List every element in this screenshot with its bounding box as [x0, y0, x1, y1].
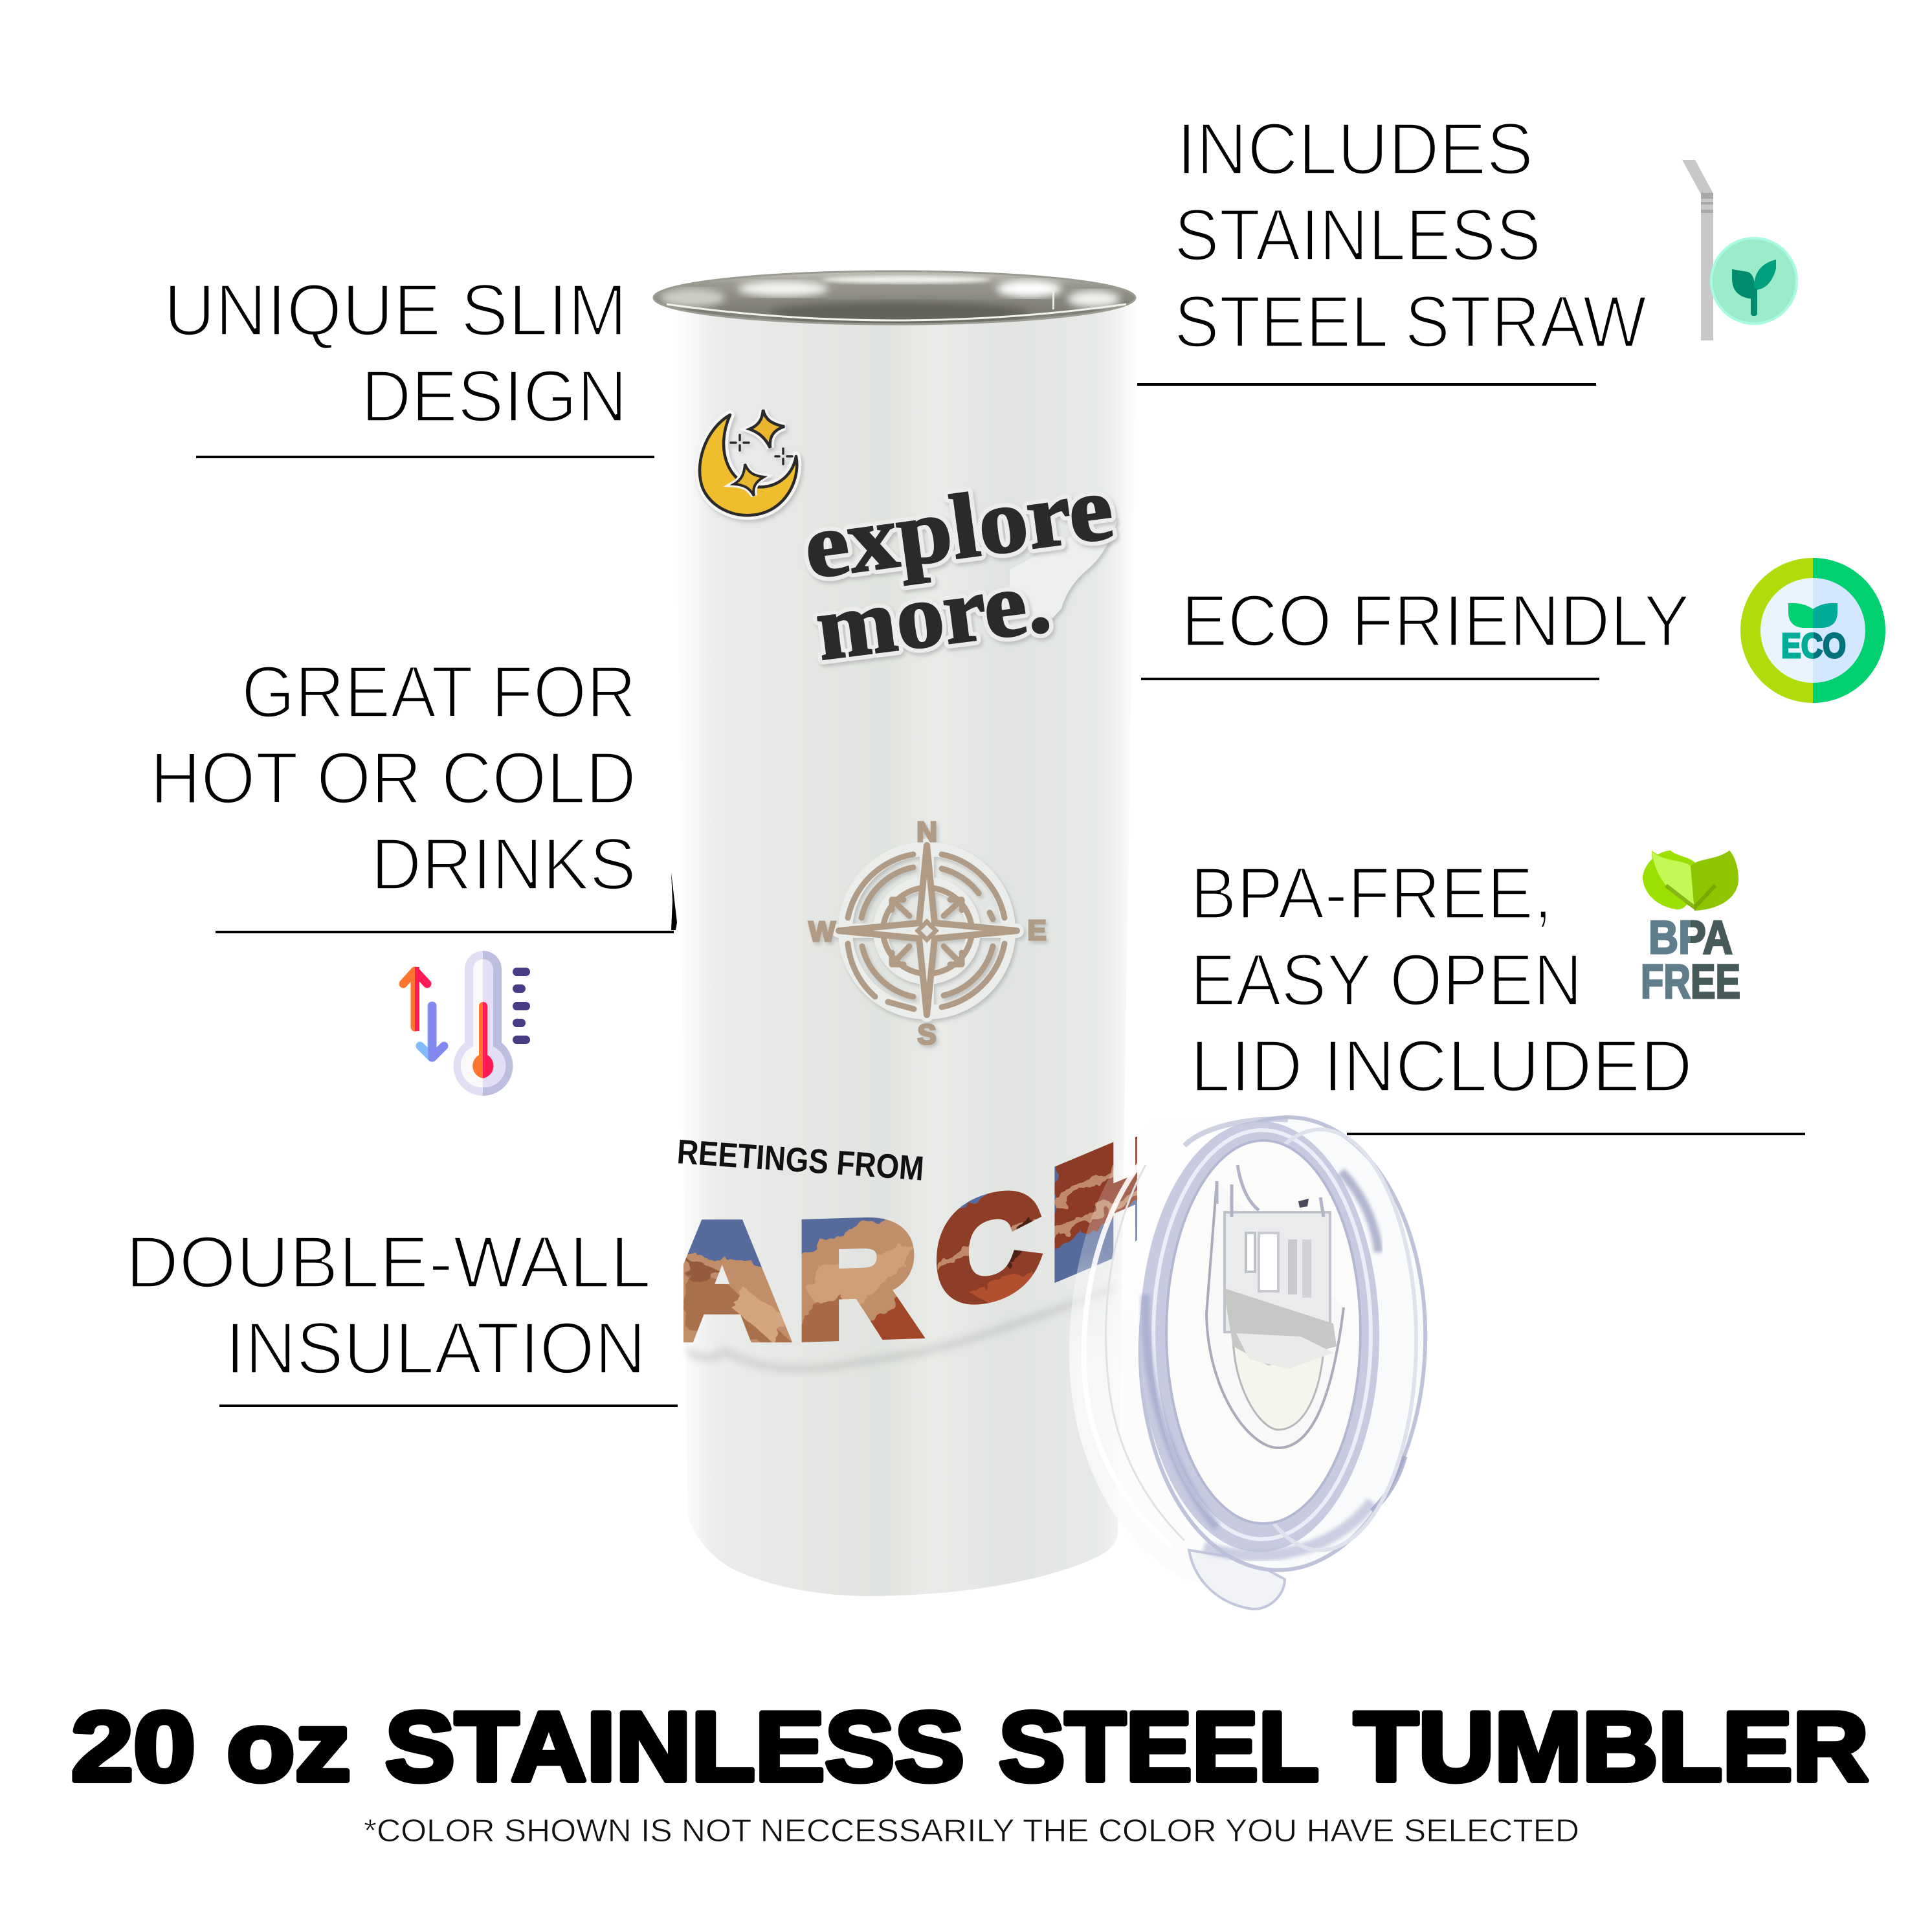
label: great for hot or cold drinks: HOT OR COLD	[150, 737, 636, 819]
icon: eco badge: ECO	[1781, 627, 1846, 665]
explore more sticker: explore	[798, 456, 1118, 598]
temperature scale dashes	[513, 968, 530, 1044]
label: great for hot or cold drinks: GREAT FOR	[241, 651, 636, 733]
title: TUMBLER	[1354, 1692, 1869, 1802]
icon: bpa free: FREE	[1641, 955, 1740, 1008]
icon: straw with sprout	[1682, 160, 1797, 340]
stray black sliver at edge	[671, 872, 677, 930]
label: double-wall insulation	[126, 1221, 678, 1407]
moon and stars sticker	[700, 410, 797, 515]
title	[71, 1692, 1869, 1802]
lid slider	[1217, 1165, 1337, 1369]
explore more sticker: more.	[810, 549, 1056, 680]
compass sticker: E	[1027, 915, 1047, 946]
arrow down	[420, 1006, 444, 1058]
tumbler rim	[654, 271, 1135, 325]
icon: thermometer with arrows	[403, 951, 530, 1096]
label: double-wall insulation: INSULATION	[225, 1307, 646, 1389]
tumbler	[641, 271, 1159, 1596]
compass sticker	[808, 816, 1047, 1050]
label: great for hot or cold drinks: DRINKS	[371, 823, 636, 905]
sprout badge	[1711, 238, 1797, 324]
explore more sticker: explore	[798, 456, 1118, 598]
icon: bpa free	[1641, 850, 1740, 1008]
label: double-wall insulation: DOUBLE-WALL	[126, 1221, 651, 1303]
title: STEEL	[999, 1692, 1319, 1802]
footnote: *COLOR SHOWN IS NOT NECCESSARILY THE COLOR YOU HAVE SELECTED	[364, 1814, 1579, 1849]
clear lid	[1069, 1113, 1433, 1609]
label: great for hot or cold drinks	[150, 651, 674, 933]
label: unique slim design: DESIGN	[361, 355, 627, 437]
label: eco friendly: ECO FRIENDLY	[1181, 580, 1690, 661]
lid outer lip	[1133, 1113, 1433, 1575]
compass sticker: S	[917, 1019, 937, 1050]
label: includes stainless steel straw: STAINLESS	[1174, 194, 1541, 276]
label: unique slim design	[164, 269, 654, 458]
straw	[1682, 160, 1713, 340]
compass sticker: N	[916, 816, 937, 848]
compass sticker: W	[808, 916, 836, 948]
explore more sticker: more.	[810, 549, 1056, 680]
lid thick ring	[1140, 1119, 1416, 1555]
label: includes stainless steel straw: INCLUDES	[1177, 108, 1533, 190]
shadow beneath arch lettering	[687, 1288, 1113, 1369]
title: 20 oz	[71, 1692, 351, 1802]
label: bpa-free easy open lid included: BPA-FREE,	[1190, 852, 1553, 934]
label: includes stainless steel straw: STEEL STRAW	[1174, 281, 1647, 362]
label: bpa-free easy open lid included: EASY OPEN	[1190, 939, 1582, 1021]
lid inner face	[1166, 1140, 1360, 1524]
icon: bpa free: BPA	[1649, 912, 1733, 964]
arch lettering with rock photo fill	[683, 1137, 1137, 1342]
label: unique slim design: UNIQUE SLIM	[164, 269, 627, 351]
label: bpa-free easy open lid included: LID INCLUDED	[1190, 1025, 1693, 1107]
explore more sticker	[798, 456, 1118, 680]
lid side wall	[1069, 1120, 1424, 1599]
tumbler body	[675, 304, 1137, 1596]
label: bpa-free easy open lid included	[1190, 852, 1805, 1135]
label: includes stainless steel straw	[1137, 108, 1647, 386]
arrow up	[403, 967, 427, 1031]
lid tab	[1189, 1550, 1285, 1609]
lid sip opening	[1206, 1181, 1344, 1448]
icon: eco badge	[1740, 558, 1885, 703]
greetings from text: REETINGS FROM	[676, 1133, 925, 1188]
title: STAINLESS	[385, 1692, 964, 1802]
thermometer	[454, 951, 483, 1096]
